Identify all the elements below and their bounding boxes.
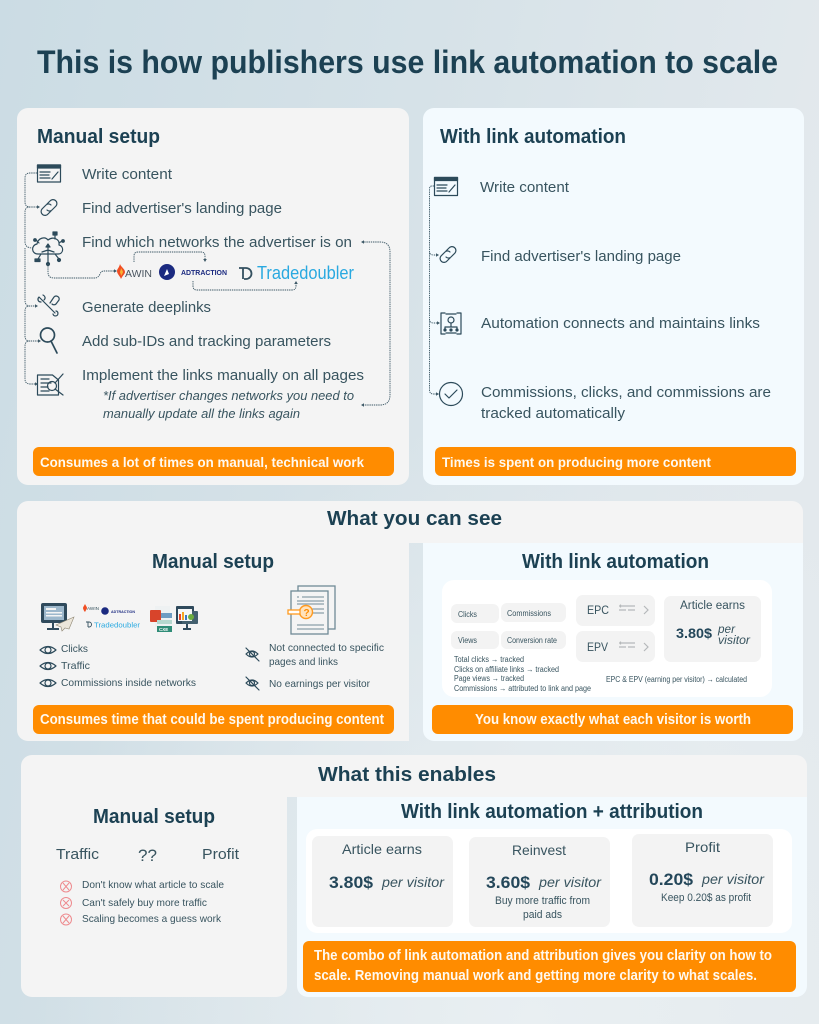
logos: affiliate networks [83, 604, 141, 630]
logo: adtraction: ADTRACTION [181, 268, 227, 277]
list: hidden metrics: No earnings per visitor [269, 678, 370, 690]
step list: Write content [480, 179, 570, 196]
callout: manual time cost [33, 447, 394, 476]
logos: affiliate networks: Tradedoubler [94, 622, 141, 630]
callout: time lost [33, 705, 394, 734]
chips: tracked metrics: Views [458, 636, 477, 645]
note: network changes: manually update all the links again [103, 407, 300, 421]
list: visible metrics: Clicks [61, 643, 88, 655]
chips: tracked metrics: Commissions [507, 609, 551, 618]
note: network changes [103, 389, 354, 421]
white card [306, 829, 792, 933]
card: EPV [576, 631, 655, 662]
card: EPV: EPV [587, 640, 608, 654]
panel: manual setup outcome [21, 797, 287, 997]
card: EPC [576, 595, 655, 626]
callout: combo summary: scale. Removing manual work and getting more clarity to what scales. [314, 968, 757, 984]
step list: Implement the links manually on all pages [82, 367, 364, 384]
callout: combo summary: The combo of link automation and attribution gives you clarity on how to [314, 948, 772, 964]
heading: manual setup: Manual setup [37, 126, 160, 148]
card: article earns: 3.80$ [676, 625, 712, 641]
step list: Find advertiser's landing page [82, 200, 282, 217]
icon: link [440, 247, 456, 262]
logo: tradedoubler: Tradedoubler [257, 263, 354, 283]
connector: left dashed flow [25, 173, 41, 386]
logos: affiliate networks: AWIN [87, 606, 99, 611]
heading: with link automation + attribution: With link automation + attribution [401, 801, 703, 823]
connector: dashed flow [430, 186, 440, 396]
connector: right change loop [361, 240, 390, 407]
text: tracked notes: Clicks on affiliate links → tracked [454, 665, 559, 674]
section: what you can see [17, 501, 803, 741]
card: reinvest: Buy more traffic from [495, 895, 590, 907]
icon: write content [434, 178, 458, 196]
callout: visitor worth: You know exactly what each visitor is worth [475, 712, 751, 728]
card: EPC: EPC [587, 603, 609, 617]
icon: automation [441, 313, 461, 334]
panel: manual setup workflow [17, 108, 409, 485]
card: reinvest: paid ads [523, 909, 562, 921]
panel: section header: What this enables [318, 764, 496, 786]
flow: traffic to profit: Profit [202, 846, 240, 863]
panel: manual setup visibility [17, 543, 409, 741]
card: article earns: Article earns [680, 600, 745, 612]
panel: section header: What you can see [327, 508, 502, 530]
heading: manual setup: Manual setup [93, 806, 215, 828]
list: hidden metrics: pages and links [269, 656, 338, 668]
card: profit [632, 834, 773, 927]
card: article earns: 3.80$ [329, 873, 374, 892]
panel: section header [17, 501, 803, 543]
step list: Find which networks the advertiser is on [82, 234, 352, 251]
title: This is how publishers use link automation to scale [37, 44, 778, 80]
card: reinvest: 3.60$ [486, 873, 531, 892]
list: hidden metrics [246, 642, 384, 690]
step list: Commissions, clicks, and commissions are [481, 384, 771, 401]
icon: check circle [440, 382, 462, 406]
card: article earns: per [717, 624, 736, 636]
chips: tracked metrics: Conversion rate [507, 636, 557, 645]
icon: chart monitor [176, 606, 198, 630]
step list: Find advertiser's landing page [481, 248, 681, 265]
note: network changes: *If advertiser changes networks you need to [103, 389, 354, 403]
flow: traffic to profit: Traffic [56, 846, 100, 863]
icon: documents with question magnifier: ? [304, 608, 310, 619]
heading: with link automation: With link automation [522, 551, 709, 573]
text: tracked notes: Commissions → attributed to link and page [454, 684, 591, 693]
icon: link [41, 200, 57, 215]
list: visible metrics: Commissions inside networks [61, 677, 196, 689]
card: article earns: per visitor [381, 874, 445, 890]
connector: network links [48, 252, 298, 290]
card: article earns: Article earns [342, 841, 422, 857]
callout: time on content [435, 447, 796, 476]
card: profit: 0.20$ [649, 870, 694, 889]
flow: traffic to profit [56, 846, 240, 865]
logos: affiliate networks: ADTRACTION [111, 610, 135, 614]
step list: Add sub-IDs and tracking parameters [82, 333, 331, 350]
list: manual limitations: Can't safely buy more traffic [82, 897, 207, 909]
icon: write content [38, 165, 60, 182]
step list: tracked automatically [481, 405, 626, 422]
panel: section header [21, 755, 807, 797]
icon: report files: CXE [159, 627, 168, 632]
icon: wrench and link [38, 295, 59, 316]
card: profit: per visitor [701, 871, 765, 887]
card: reinvest: Reinvest [512, 842, 566, 858]
panel: link automation visibility [423, 543, 803, 741]
card: article earns: visitor [718, 635, 751, 647]
step list: Generate deeplinks [82, 299, 211, 316]
heading: manual setup: Manual setup [152, 551, 274, 573]
callout: combo summary [303, 941, 796, 992]
icon: computer and paper plane [41, 603, 74, 631]
list: visible metrics [40, 643, 196, 689]
text: calculated note: EPC & EPV (earning per visitor) → calculated [606, 675, 747, 684]
card: reinvest [469, 837, 610, 927]
callout: time lost: Consumes time that could be spent producing content [40, 712, 384, 728]
chips: tracked metrics: Clicks [458, 610, 477, 619]
card: article earns [664, 596, 761, 662]
list: manual limitations: Don't know what article to scale [82, 879, 224, 891]
flow: traffic to profit: ?? [138, 846, 157, 865]
heading: with link automation: With link automation [440, 126, 626, 148]
list: manual limitations [60, 879, 224, 925]
card: profit: Keep 0.20$ as profit [661, 892, 751, 904]
logo: awin: AWIN [125, 269, 152, 280]
icon: network cloud [33, 232, 64, 266]
callout: manual time cost: Consumes a lot of times on manual, technical work [40, 454, 364, 470]
card: metrics [442, 580, 772, 697]
chips: tracked metrics [451, 603, 566, 649]
step list: Automation connects and maintains links [481, 315, 760, 332]
card: article earns [312, 836, 453, 927]
panel: link automation workflow [423, 108, 804, 485]
logo: adtraction [159, 264, 227, 280]
card: reinvest: per visitor [538, 874, 602, 890]
panel: automation and attribution outcome [297, 797, 807, 997]
text: tracked notes: Total clicks → tracked [454, 655, 524, 664]
card: profit: Profit [685, 839, 720, 855]
icon: documents with question magnifier [288, 586, 335, 634]
step list [82, 166, 364, 384]
text: tracked notes [454, 655, 591, 693]
step list: Write content [82, 166, 173, 183]
step list [480, 179, 771, 422]
icon: magnifier [40, 328, 57, 353]
callout: time on content: Times is spent on producing more content [442, 454, 711, 470]
logo: awin [117, 264, 152, 280]
section: what this enables [21, 755, 807, 997]
text: tracked notes: Page views → tracked [454, 674, 524, 683]
callout: visitor worth [432, 705, 793, 734]
icon: report files [150, 606, 172, 632]
list: manual limitations: Scaling becomes a guess work [82, 913, 222, 925]
list: hidden metrics: Not connected to specific [269, 642, 384, 654]
list: visible metrics: Traffic [61, 660, 90, 672]
icon: document edit [38, 374, 63, 395]
